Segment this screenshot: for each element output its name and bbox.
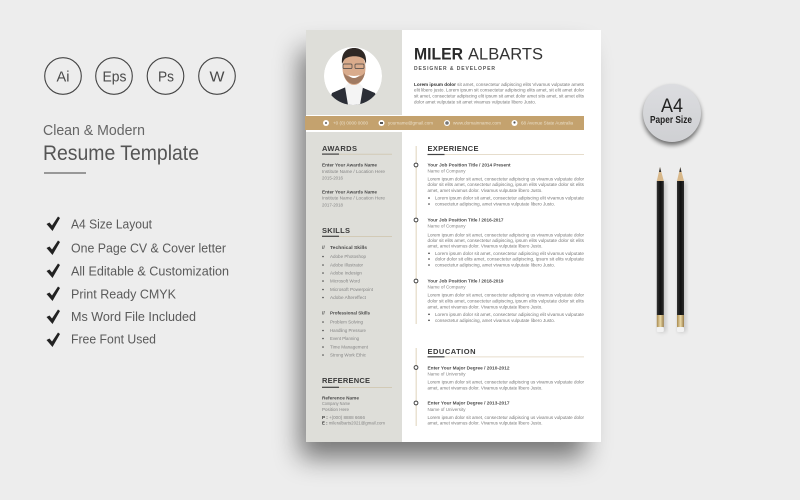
main title: Resume Template (43, 142, 199, 165)
contact: website (444, 120, 501, 126)
job 2: consectetur adipiscing, amet vivamus vulputate libero Justo. (435, 263, 555, 268)
job role: DESIGNER & DEVELOPER (414, 66, 495, 72)
professional skills list: Handling Pressure (330, 328, 366, 333)
candidate name (414, 44, 543, 64)
education section (414, 347, 584, 426)
candidate name: MILER (414, 44, 463, 64)
candidate name: ALBARTS (468, 44, 543, 64)
technical skills list: // (322, 245, 325, 251)
sidebar bottom (306, 132, 402, 442)
reference details: Position Here (322, 407, 349, 412)
professional skills list: Professional Skills (330, 311, 370, 317)
job 2: Lorem ipsum dolor sit amet, consectetur adipiscing elit vivamus vulputate (435, 251, 584, 256)
timeline: experience (415, 146, 418, 324)
professional skills list (322, 311, 370, 358)
award entry 2: 2017-2018 (322, 203, 343, 208)
technical skills list (322, 245, 374, 300)
degree 1: Name of University (428, 372, 466, 377)
format badges (45, 58, 235, 94)
contact: email (378, 120, 433, 126)
feature: One Page CV: One Page CV & Cover letter (71, 240, 227, 256)
A4 paper size badge (643, 84, 701, 145)
job 1 (414, 163, 585, 207)
skills section (322, 226, 392, 358)
badge: Ps: Ps (158, 68, 174, 86)
A4 paper size badge: A4 (661, 96, 683, 117)
contact: email: yourname@gmail.com (388, 121, 433, 126)
badge: Eps: Eps (102, 68, 126, 86)
A4 paper size badge: Paper Size (650, 115, 692, 126)
job 1: dolor sit elits amet, consectetur adipiscing, ipsum elits vulputate dolor sit elits (428, 182, 585, 187)
professional skills list: // (322, 311, 325, 317)
award entry 1: 2015-2016 (322, 176, 343, 181)
awards section (322, 144, 392, 208)
title underline (44, 172, 86, 174)
technical skills list: Adobe Photoshop (330, 254, 366, 259)
pencil 2 (677, 167, 686, 332)
professional skills list: Problem Solving (330, 320, 363, 325)
badge: Ai (45, 58, 81, 94)
job 2: Your Job Position Title / 2016-2017 (428, 218, 504, 224)
degree 2: Lorem ipsum dolor sit amet, consectetur adipiscing us vivamus vulputate dolor (428, 415, 584, 420)
degree 1: Enter Your Major Degree / 2010-2012 (428, 365, 510, 371)
paper shadow (300, 50, 585, 458)
feature: Free Font Used: Free Font Used (71, 332, 156, 346)
portrait photo (324, 47, 382, 105)
award entry 2: Enter Your Awards Name (322, 190, 377, 196)
job 2 (414, 218, 585, 268)
job 3: consectetur adipiscing, amet vivamus vulputate libero Justo. (435, 318, 555, 323)
job 3: Lorem ipsum dolor sit amet, consectetur adipiscing us vivamus vulputate dolor (428, 293, 584, 298)
heading: skills: SKILLS (322, 226, 350, 235)
job 3 (414, 279, 585, 323)
badge: W: W (210, 68, 225, 86)
paper sheet (306, 30, 601, 442)
badge: W (199, 58, 235, 94)
contact: address: 68 Avenue State Australia (521, 121, 573, 126)
degree 2: amet, amet vivamus dolor. Vivamus vulputate libero Justo. (428, 421, 542, 426)
job 1: Lorem ipsum dolor sit amet, consectetur adipiscing us vivamus vulputate dolor (428, 176, 584, 181)
technical skills list: Microsoft Word (330, 279, 360, 284)
heading: awards: AWARDS (322, 144, 357, 153)
technical skills list: Technical Skills (330, 245, 367, 251)
reference details: Company Name (322, 401, 350, 406)
technical skills list: Adobe Indesign (330, 271, 362, 276)
feature: Print Ready CMYK: Print Ready CMYK (71, 286, 176, 302)
job 2: dolor sit elits amet, consectetur adipiscing, ipsum elits vulputate dolor sit elits (428, 238, 585, 243)
reference section (322, 376, 392, 426)
heading: experience: EXPERIENCE (428, 144, 478, 153)
sidebar top (306, 30, 402, 115)
reference details: E : mileralbarts2021@gmail.com (322, 421, 385, 426)
badge: Ai: Ai (56, 68, 70, 86)
timeline: education (415, 348, 418, 426)
badge: Eps (96, 58, 132, 94)
contact: phone (323, 120, 368, 126)
job 2: dolor dolor sit elits amet, consectetur adipiscing, ipsum sit elits vulputate (435, 257, 584, 262)
intro paragraph: elit libero justo. Lorem ipsum sit consectetur adipiscing elits amet, sit elit amet dolor (414, 88, 584, 93)
job 1: Lorem ipsum dolor sit amet, consectetur adipiscing elit vivamus vulputate (435, 196, 584, 201)
intro paragraph: sit amet, consectetur adipiscing elit ipsum sit amet dolor amet sits amet, sit amet elits (414, 93, 585, 98)
reference details (322, 396, 385, 426)
rule: awards (322, 154, 392, 155)
job 1: Your Job Position Title / 2014 Present (428, 163, 511, 169)
degree 2: Enter Your Major Degree / 2013-2017 (428, 401, 510, 407)
job 2: amet, amet vivamus dolor. Vivamus vulputate libero Justo. (428, 243, 542, 248)
job 3: dolor sit elits amet, consectetur adipiscing, ipsum elits vulputate dolor sit elits (428, 299, 585, 304)
degree 2 (414, 401, 584, 426)
feature: A4 Size Layout: A4 Size Layout (71, 216, 152, 232)
job 2: Lorem ipsum dolor sit amet, consectetur adipiscing us vivamus vulputate dolor (428, 233, 584, 238)
feature checklist (46, 216, 229, 347)
job 2: Name of Company (428, 224, 466, 229)
job 3: Lorem ipsum dolor sit amet, consectetur adipiscing elit vivamus vulputate (435, 312, 584, 317)
professional skills list: Event Planning (330, 336, 359, 341)
intro paragraph: Lorem ipsum dolor sit amet, consectetur adipiscing elits Vivamus vulputate amets (414, 82, 585, 87)
heading: education: EDUCATION (428, 347, 476, 356)
award entry 1: Enter Your Awards Name (322, 163, 377, 169)
job 1: Name of Company (428, 169, 466, 174)
heading: reference: REFERENCE (322, 376, 370, 385)
feature: Ms Word File: Ms Word File Included (71, 309, 196, 324)
reference details: Reference Name (322, 396, 359, 402)
technical skills list: Microsoft Powerpoint (330, 287, 374, 292)
award entry 2: Institute Name / Location Here (322, 196, 385, 201)
experience section (414, 144, 585, 324)
intro paragraph (414, 82, 585, 104)
award entry 2 (322, 190, 385, 208)
degree 1: Lorem ipsum dolor sit amet, consectetur adipiscing us vivamus vulputate dolor (428, 379, 584, 384)
rule: skills (322, 236, 392, 237)
technical skills list: Adobe Illustrator (330, 263, 363, 268)
award entry 1 (322, 163, 385, 181)
contact: website: www.domainname.com (453, 121, 501, 126)
subtitle: Clean & Modern (43, 122, 145, 139)
pencil 1 (657, 167, 666, 332)
job 1: consectetur adipiscing, amet vivamus vulputate libero Justo. (435, 202, 555, 207)
professional skills list: Strong Work Ethic (330, 353, 367, 358)
rule: education (428, 356, 584, 357)
job 1: amet, amet vivamus dolor. Vivamus vulputate libero Justo. (428, 188, 542, 193)
technical skills list: Adobe Aftereffect (330, 295, 367, 300)
feature: All Editable: All Editable & Customization (71, 264, 229, 278)
badge: Ps (147, 58, 184, 94)
job 3: Name of Company (428, 285, 466, 290)
degree 1: amet, amet vivamus dolor. Vivamus vulputate libero Justo. (428, 385, 542, 390)
professional skills list: Time Management (330, 345, 369, 350)
intro paragraph: dolor amet vulputate sit amet vivamus vulputate libero Justo. (414, 99, 536, 104)
degree 1 (414, 365, 584, 390)
job 3: Your Job Position Title / 2018-2019 (428, 279, 504, 285)
contact: phone: +0 (0) 0000 0000 (333, 121, 368, 126)
resume page (305, 30, 601, 442)
degree 2: Name of University (428, 407, 466, 412)
award entry 1: Institute Name / Location Here (322, 169, 385, 174)
contact bar (305, 116, 584, 130)
reference details: P : +(000) 8888 6666 (322, 415, 365, 420)
rule: reference (322, 387, 392, 388)
rule: experience (428, 154, 584, 155)
job 3: amet, amet vivamus dolor. Vivamus vulputate libero Justo. (428, 304, 542, 309)
